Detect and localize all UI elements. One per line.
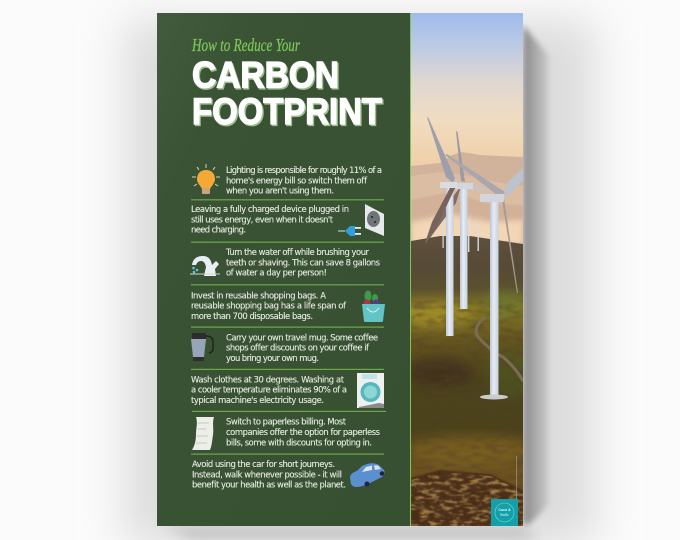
small distant turbines <box>442 208 479 252</box>
tip 5: travel mug: you bring your own mug. <box>226 353 319 363</box>
tip 7: paperless billing: companies offer the option for paperless <box>226 427 380 437</box>
tip 8: avoid the car: Avoid using the car for short journeys. <box>192 459 335 469</box>
tip 7: paperless billing: Switch to paperless billing. Most <box>226 417 347 427</box>
tip 4: shopping bags <box>191 290 385 322</box>
logo badge: Smile <box>500 512 509 517</box>
title: Carbon Footprint <box>192 54 384 134</box>
icon: washing machine <box>357 373 384 408</box>
credit strip <box>516 456 517 499</box>
distant hazy mountains <box>411 152 523 245</box>
tip 5: travel mug: Carry your own travel mug. Some coffee <box>226 332 378 342</box>
tip 6: wash temperature: a cooler temperature eliminates 90% of a <box>191 385 347 395</box>
title: Carbon Footprint: CARBON <box>192 54 339 96</box>
tip 3: water: teeth or shaving. This can save 8 gallons <box>226 257 380 267</box>
title: Carbon Footprint: FOOTPRINT <box>192 91 382 132</box>
logo badge <box>491 499 518 526</box>
tip 2: unplug devices: Leaving a fully charged device plugged in <box>191 204 349 214</box>
tip 3: water <box>190 247 380 278</box>
tip 3: water: Turn the water off while brushing your <box>225 247 370 257</box>
title: Carbon Footprint: CARBON <box>193 56 340 97</box>
title: Carbon Footprint: FOOTPRINT <box>193 93 384 134</box>
photo: wind turbines at sunset <box>411 13 523 526</box>
icon: wall socket and plug <box>338 204 384 236</box>
icon: paper bill <box>192 417 214 450</box>
tip 1: lighting: Lighting is responsible for roughly 11% of a <box>226 165 382 175</box>
tip 1: lighting: when you aren't using them. <box>226 186 334 196</box>
tip 1: lighting: home's energy bill so switch them off <box>226 175 367 185</box>
icon: reusable bag with vegetables <box>362 290 385 322</box>
tip 4: shopping bags: Invest in reusable shopping bags. A <box>191 290 326 300</box>
tip 2: unplug devices: still uses energy, even when it doesn't <box>191 214 334 224</box>
turbine: front <box>445 154 523 400</box>
tip 7: paperless billing: bills, some with discounts for opting in. <box>226 437 372 447</box>
tip 4: shopping bags: more than 700 disposable bags. <box>191 311 313 321</box>
tip 7: paperless billing <box>192 417 380 450</box>
tip 2: unplug devices <box>191 204 384 236</box>
tip 8: avoid the car <box>192 459 385 490</box>
icon: travel mug <box>191 333 213 361</box>
tip 8: avoid the car: benefit your health as well as the planet. <box>192 480 346 490</box>
turbine: rear <box>430 131 490 309</box>
tip 6: wash temperature: Wash clothes at 30 degrees. Washing at <box>191 374 345 384</box>
turbine: left <box>425 117 457 336</box>
winding road <box>476 317 523 381</box>
tip 6: wash temperature <box>191 373 384 408</box>
logo badge: Coco & <box>498 508 511 512</box>
tip 5: travel mug: shops offer discounts on your coffee if <box>226 343 370 353</box>
tip 2: unplug devices: need charging. <box>191 225 246 235</box>
tip 1: lighting <box>192 164 382 196</box>
tip 5: travel mug <box>191 332 378 363</box>
sky <box>411 13 523 178</box>
poster drop shadow <box>165 25 548 540</box>
icon: blue car <box>350 463 385 487</box>
tip 3: water: of water a day per person! <box>226 268 327 278</box>
icon: light bulb <box>192 164 220 194</box>
tip 6: wash temperature: typical machine's electricity usage. <box>191 395 324 405</box>
icon: tap with water <box>190 256 220 276</box>
tip 8: avoid the car: Instead, walk whenever possible - it will <box>192 469 342 479</box>
ground <box>411 236 523 526</box>
heading: How to Reduce Your: How to Reduce Your <box>191 35 301 55</box>
tip 4: shopping bags: reusable shopping bag has a life span of <box>191 301 347 311</box>
panel: green text panel <box>157 13 411 526</box>
